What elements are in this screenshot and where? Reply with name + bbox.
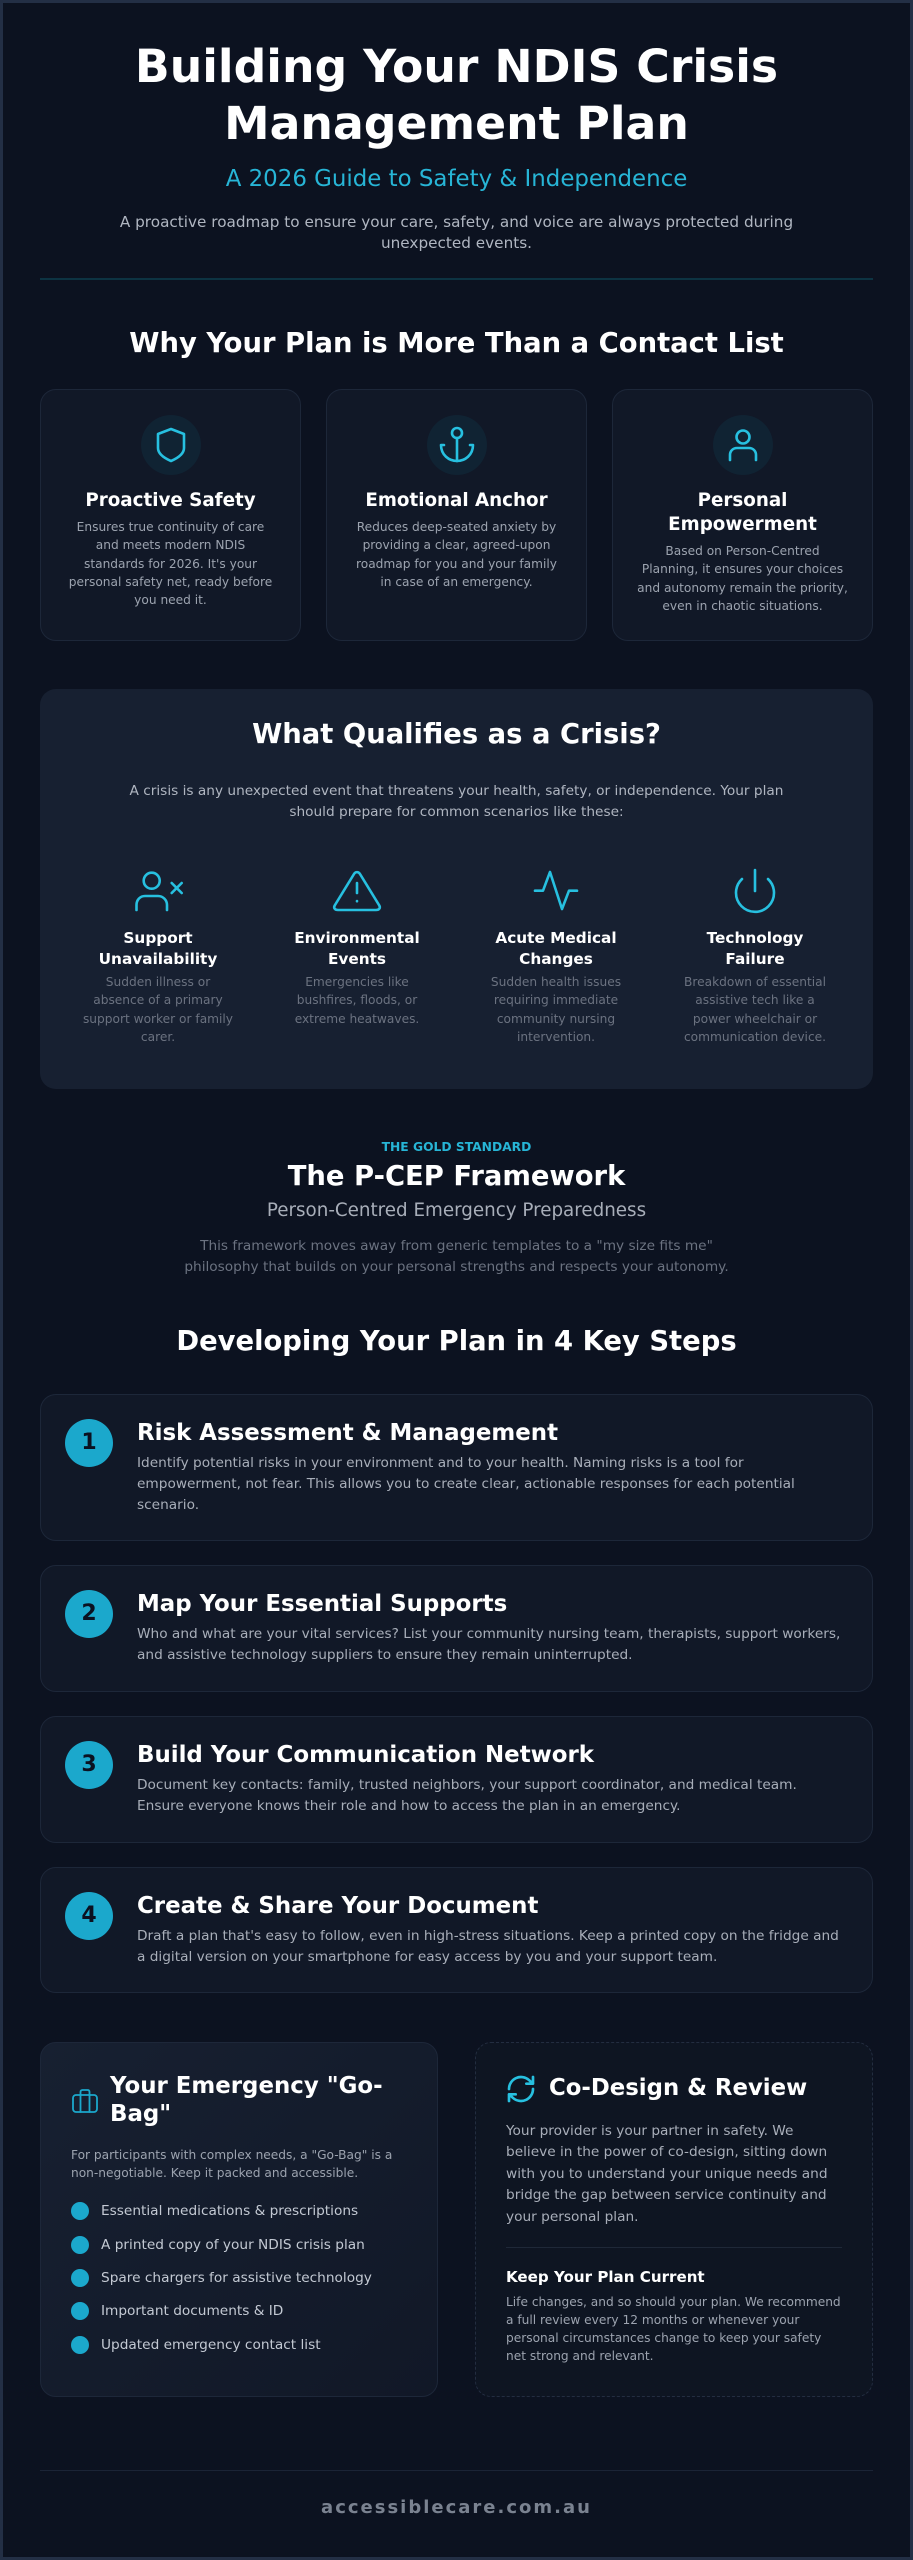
keep current text: a full review every 12 months or whenever your [506,2313,799,2327]
scenario title: Environmental [294,929,420,947]
step 2 [40,1565,873,1692]
card title: Emotional Anchor [365,490,548,510]
title [135,40,778,150]
co-design text: bridge the gap between service continuity and [506,2187,827,2203]
scenario text: Breakdown of essential [684,975,826,989]
panel: what qualifies as a crisis [40,689,873,1089]
scenario text: requiring immediate [494,993,618,1007]
step title: Risk Assessment & Management [137,1420,558,1446]
scenario text: Sudden illness or [106,975,210,989]
scenario: environmental events [294,870,420,1026]
tagline: unexpected events. [381,234,532,252]
scenario title [706,929,803,968]
step number [65,1741,113,1789]
scenario text: support worker or family [83,1012,233,1026]
co-design text: with you to understand your unique needs and [506,2166,828,2182]
go-bag item: Essential medications & prescriptions [101,2203,358,2219]
title: Building Your NDIS Crisis [135,40,778,93]
step 3 [40,1716,873,1843]
keep current text [506,2293,841,2365]
icon: warning triangle [332,870,382,912]
scenario text: Sudden health issues [491,975,621,989]
scenario text [295,975,419,1026]
card text: roadmap for you and your family [356,557,557,571]
scenario text [491,975,621,1044]
panel: co-design and review [475,2042,873,2397]
scenario title [495,929,617,968]
step text: Who and what are your vital services? List your community nursing team, therapists, support workers, [137,1626,840,1642]
step text: scenario. [137,1497,199,1513]
heading: why your plan: Why Your Plan is More Than a Contact List [129,328,784,359]
card text: standards for 2026. It's your [84,557,257,571]
icon: person [712,415,772,475]
card text [69,520,272,607]
go-bag heading: Bag" [110,2100,171,2126]
step title: Build Your Communication Network [137,1742,594,1768]
scenario text: community nursing [497,1012,615,1026]
header [120,40,793,252]
icon: power [734,868,776,914]
step title: Create & Share Your Document [137,1893,538,1919]
framework text: philosophy that builds on your personal strengths and respects your autonomy. [184,1259,729,1275]
icon: refresh [508,2076,534,2102]
scenario title [99,929,217,968]
step text: and assistive technology suppliers to ensure they remain uninterrupted. [137,1647,633,1663]
go-bag item: Updated emergency contact list [101,2337,321,2353]
keep current text: net strong and relevant. [506,2349,654,2363]
go-bag item: Important documents & ID [101,2303,283,2319]
panel: proactive safety [40,389,301,641]
scenario text: power wheelchair or [693,1012,817,1026]
step number: 1 [81,1430,97,1455]
card text: Ensures true continuity of care [77,520,264,534]
scenario text: extreme heatwaves. [295,1012,419,1026]
go-bag item: A printed copy of your NDIS crisis plan [101,2236,365,2252]
crisis intro: A crisis is any unexpected event that threatens your health, safety, or independence. Your plan [130,783,783,799]
card title: Proactive Safety [85,490,256,510]
scenario: support unavailability [83,871,233,1044]
scenario title [294,929,420,968]
step text: Document key contacts: family, trusted neighbors, your support coordinator, and medical team. [137,1776,797,1792]
step text [137,1626,840,1663]
icon: anchor [426,415,486,475]
framework text: This framework moves away from generic templates to a "my size fits me" [200,1238,713,1254]
crisis heading: What Qualifies as a Crisis? [252,719,661,750]
go-bag intro: non-negotiable. Keep it packed and accessible. [71,2166,358,2180]
step text [137,1776,797,1814]
step text: a digital version on your smartphone for easy access by you and your support team. [137,1949,717,1965]
go-bag intro [71,2148,392,2180]
section: P-CEP framework [184,1140,729,1275]
card title: Empowerment [668,514,817,535]
keep current heading: Keep Your Plan Current [506,2268,705,2286]
crisis intro [130,783,783,820]
step number [65,1590,113,1638]
keep current text: Life changes, and so should your plan. We recommend [506,2295,841,2309]
framework subtitle: Person-Centred Emergency Preparedness [267,1200,646,1221]
scenario text: communication device. [684,1030,826,1044]
scenario title: Failure [725,950,785,968]
icon: pulse [534,870,578,910]
scenario title: Changes [519,950,593,968]
go-bag intro: For participants with complex needs, a "Go-Bag" is a [71,2148,392,2162]
card text: Based on Person-Centred [665,544,820,558]
step text: Ensure everyone knows their role and how to access the plan in an emergency. [137,1798,680,1814]
eyebrow: THE GOLD STANDARD [382,1140,531,1154]
card text: and autonomy remain the priority, [637,581,848,595]
step number: 3 [81,1752,97,1777]
step text: Draft a plan that's easy to follow, even in high-stress situations. Keep a printed copy on the fridge and [137,1928,839,1944]
tagline: A proactive roadmap to ensure your care, safety, and voice are always protected during [120,212,793,230]
scenario: technology failure [684,868,826,1044]
subtitle: A 2026 Guide to Safety & Independence [226,166,687,192]
card text: even in chaotic situations. [662,599,823,613]
scenario text: assistive tech like a [695,993,815,1007]
card title [668,490,817,535]
go-bag heading: Your Emergency "Go- [110,2073,383,2099]
step 1 [40,1394,873,1541]
go-bag item: Spare chargers for assistive technology [101,2270,372,2286]
card text [356,520,557,589]
card text: providing a clear, agreed-upon [363,538,550,552]
scenario text: bushfires, floods, or [297,993,417,1007]
tagline [120,212,793,252]
framework title: The P-CEP Framework [288,1161,625,1192]
step title: Map Your Essential Supports [137,1591,507,1617]
scenario title: Unavailability [99,950,217,968]
card text: Planning, it ensures your choices [642,562,843,576]
crisis intro: should prepare for common scenarios like these: [289,804,624,820]
co-design text: believe in the power of co-design, sitting down [506,2144,827,2160]
co-design heading: Co-Design & Review [549,2074,807,2100]
scenario text: carer. [141,1030,175,1044]
step text: empowerment, not fear. This allows you to create clear, actionable responses for each potential [137,1476,795,1492]
card text: in case of an emergency. [380,575,533,589]
scenario title: Acute Medical [495,929,617,947]
icon: shield [140,415,200,475]
scenario text: intervention. [517,1030,595,1044]
step 4 [40,1867,873,1993]
scenario text: Emergencies like [305,975,409,989]
icon: person with x [135,871,183,912]
footer url: accessiblecare.com.au [321,2497,592,2518]
scenario title: Technology [707,929,803,947]
step text: Identify potential risks in your environment and to your health. Naming risks is a tool for [137,1454,744,1470]
step number: 2 [81,1601,97,1626]
card text: you need it. [134,593,207,607]
step number [65,1419,113,1467]
step number: 4 [81,1903,97,1928]
card text [637,544,848,613]
scenario text [684,975,826,1044]
framework text [184,1238,729,1275]
panel: emotional anchor [326,389,587,641]
card text: Reduces deep-seated anxiety by [357,520,556,534]
panel: emergency go-bag [40,2042,438,2397]
keep current text: personal circumstances change to keep your safety [506,2331,821,2345]
card text: and meets modern NDIS [96,538,245,552]
co-design text: your personal plan. [506,2209,638,2225]
step number [65,1892,113,1940]
icon: bag [72,2089,98,2113]
co-design text: Your provider is your partner in safety. We [506,2123,793,2139]
step text [137,1454,795,1513]
scenario title: Events [328,950,386,968]
card title: Personal [698,490,787,510]
co-design text [506,2123,828,2225]
scenario text: absence of a primary [93,993,223,1007]
card text: personal safety net, ready before [69,575,272,589]
heading: key steps: Developing Your Plan in 4 Key Steps [176,1326,737,1357]
scenario: acute medical changes [491,870,621,1044]
scenario title: Support [123,929,193,947]
panel: personal empowerment [612,389,873,641]
title: Management Plan [224,96,689,150]
step text [137,1928,839,1965]
scenario text [83,975,233,1044]
go-bag heading [110,2073,383,2126]
